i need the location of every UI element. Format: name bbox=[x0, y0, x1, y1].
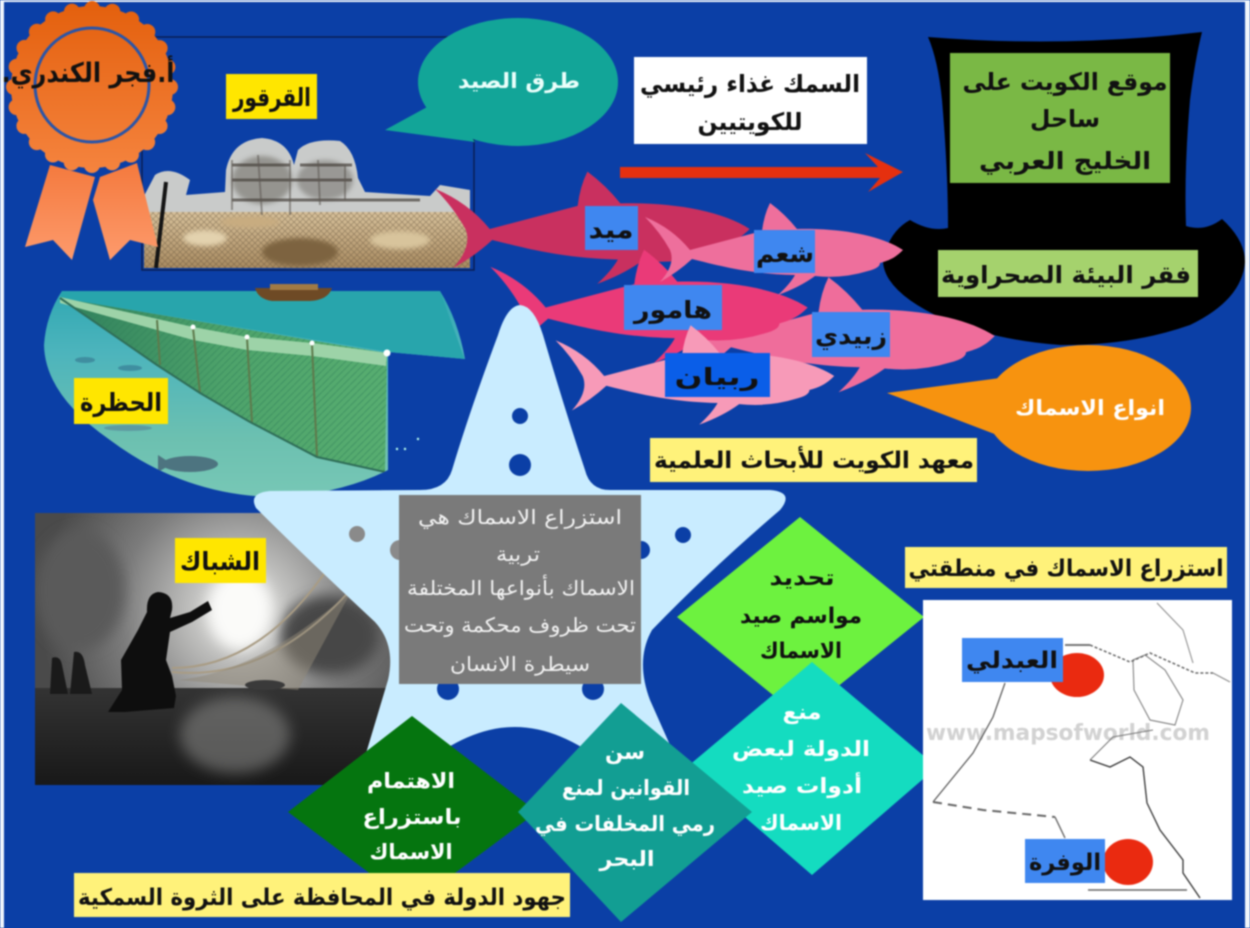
shark: زبيدي: زبيدي bbox=[815, 322, 887, 350]
definition box bbox=[399, 495, 641, 684]
marker: Al Abdali: العبدلي bbox=[966, 648, 1058, 674]
diamond: laws against dumping waste: رمي المخلفات في bbox=[535, 812, 715, 836]
label: الحظرة: الحظرة bbox=[80, 388, 162, 418]
diamond: fishing seasons: مواسم صيد bbox=[740, 604, 862, 629]
shark: شعم bbox=[645, 203, 903, 295]
diamond: interest in fish farming: باستزراع bbox=[362, 805, 462, 829]
diamond: banning fishing tools: منع bbox=[782, 700, 822, 724]
starfish dots bbox=[349, 408, 691, 700]
diamond: banning fishing tools: الاسماك bbox=[760, 811, 842, 835]
diamond: fishing seasons: تحديد bbox=[770, 566, 834, 591]
label: fish farming in my region: استزراع الاسماك في منطقتي bbox=[908, 556, 1224, 582]
speech bubble: fish species bbox=[887, 345, 1191, 471]
marker: Al Abdali bbox=[962, 638, 1104, 697]
diamond: fishing seasons bbox=[677, 517, 924, 717]
diamond: interest in fish farming: الاهتمام bbox=[367, 769, 455, 793]
definition box: استزراع الاسماك هي bbox=[418, 505, 622, 530]
speech bubble: fishing methods bbox=[385, 18, 618, 146]
diamond: banning fishing tools: أدوات صيد bbox=[742, 771, 862, 798]
marker: Al Wafra: الوفرة bbox=[1029, 850, 1101, 876]
marker: Al Wafra bbox=[1025, 839, 1153, 885]
label: الشباك bbox=[175, 538, 266, 583]
label: state efforts bbox=[74, 873, 570, 917]
rosette badge: author: أ.فجر الكندري. bbox=[2, 55, 174, 89]
diamond: laws against dumping waste: البحر bbox=[598, 847, 654, 871]
top hat: Kuwait location: موقع الكويت على bbox=[962, 68, 1168, 96]
arrow: fish to Kuwait bbox=[620, 153, 903, 192]
label: Kuwait Institute for Scientific Research bbox=[650, 438, 977, 482]
definition box: سيطرة الانسان bbox=[450, 652, 590, 676]
shark: ربيان bbox=[556, 325, 834, 425]
callout: fish is a main food: السمك غذاء رئيسي bbox=[640, 70, 860, 98]
label: fish farming in my region bbox=[905, 547, 1227, 588]
diamond: banning fishing tools: الدولة لبعض bbox=[732, 737, 870, 761]
map watermark: www.mapsofworld.com bbox=[926, 721, 1210, 746]
label: القرقور bbox=[226, 74, 317, 119]
speech bubble: fish species: انواع الاسماك bbox=[1015, 396, 1165, 420]
label: القرقور: القرقور bbox=[231, 83, 311, 113]
definition box: تربية bbox=[496, 542, 540, 566]
shark: هامور bbox=[490, 250, 808, 363]
callout: fish is a main food bbox=[634, 57, 867, 144]
speech bubble: fishing methods: طرق الصيد bbox=[458, 69, 580, 93]
photo: fish corral net (الحظرة) bbox=[40, 284, 470, 503]
rosette badge: author bbox=[2, 6, 174, 260]
top hat: Kuwait location bbox=[883, 32, 1245, 345]
top hat: Kuwait location: ساحل bbox=[1030, 105, 1100, 133]
shark: زبيدي bbox=[672, 277, 995, 392]
photo: fish trap (القرقور) bbox=[142, 37, 474, 270]
diamond: banning fishing tools bbox=[687, 662, 937, 875]
diamond: fishing seasons: الاسماك bbox=[760, 639, 842, 664]
sharks: fish species bbox=[435, 172, 995, 425]
diamond: interest in fish farming: الاسماك bbox=[370, 840, 452, 864]
label: الشباك: الشباك bbox=[180, 547, 260, 576]
diamond: laws against dumping waste: سن bbox=[605, 740, 645, 764]
diamond: laws against dumping waste: القوانين لمنع bbox=[562, 776, 690, 800]
top hat: Kuwait location: الخليج العربي bbox=[979, 147, 1151, 175]
label: state efforts: جهود الدولة في المحافظة على الثروة السمكية bbox=[78, 885, 566, 911]
starfish with definition bbox=[254, 305, 786, 800]
photo: man casting a net (الشباك) bbox=[35, 513, 393, 785]
shark: ميد bbox=[435, 172, 750, 284]
callout: fish is a main food: للكويتيين bbox=[698, 108, 802, 136]
top hat: Kuwait location: فقر البيئة الصحراوية bbox=[941, 261, 1191, 289]
diamond: interest in fish farming bbox=[288, 716, 537, 905]
shark: ربيان: ربيان bbox=[674, 363, 760, 391]
diamond: laws against dumping waste bbox=[518, 703, 752, 922]
shark: هامور: هامور bbox=[633, 296, 712, 324]
label: الحظرة bbox=[74, 378, 168, 424]
definition box: تحت ظروف محكمة وتحت bbox=[404, 613, 636, 637]
definition box: الاسماك بأنواعها المختلفة bbox=[407, 574, 635, 600]
map of Kuwait bbox=[923, 600, 1232, 900]
label: Kuwait Institute for Scientific Research: معهد الكويت للأبحاث العلمية bbox=[654, 445, 974, 474]
shark: ميد: ميد bbox=[588, 215, 634, 244]
shark: شعم: شعم bbox=[756, 240, 814, 268]
